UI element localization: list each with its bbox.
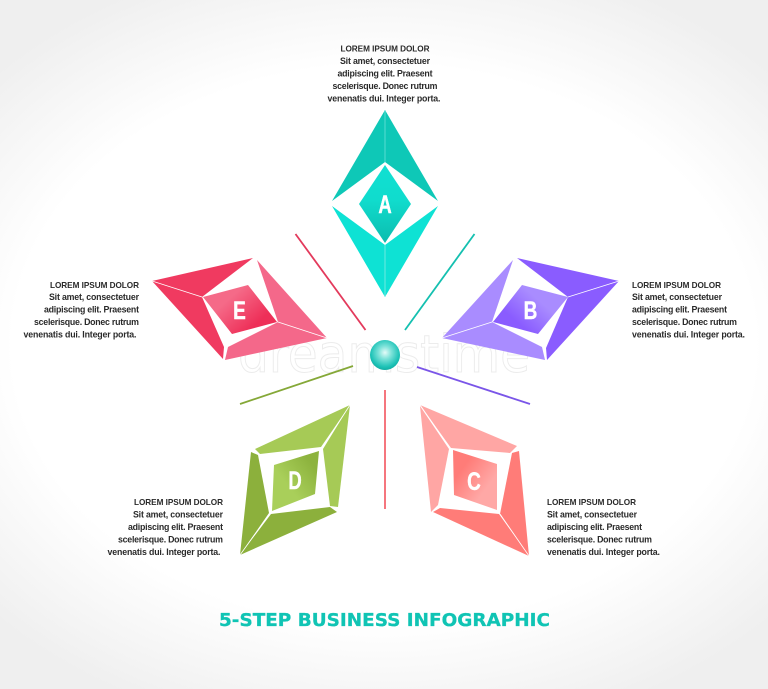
- letter B: B: [524, 296, 537, 325]
- text block B: LOREM IPSUM DOLOR: [632, 281, 721, 290]
- text block D: venenatis dui. Integer porta.: [108, 547, 220, 557]
- step B diamond: [442, 258, 619, 360]
- text block C: venenatis dui. Integer porta.: [547, 547, 660, 557]
- text block D: Sit amet, consectetuer: [133, 510, 224, 520]
- text block A: [328, 44, 440, 104]
- text block E: [24, 281, 140, 340]
- step A diamond: [332, 110, 438, 297]
- step C diamond: [420, 405, 529, 556]
- step E diamond: [152, 258, 327, 360]
- text block D: [108, 498, 224, 557]
- watermark: dreamstime: [238, 325, 530, 385]
- center ball: [370, 340, 400, 370]
- letter C: C: [467, 467, 481, 496]
- text block A: LOREM IPSUM DOLOR: [340, 44, 430, 54]
- text block E: scelerisque. Donec rutrum: [34, 317, 139, 327]
- connector lines: [240, 234, 530, 509]
- letter E: E: [233, 296, 246, 325]
- text block C: Sit amet, consectetuer: [547, 510, 638, 520]
- step D diamond: [240, 405, 350, 555]
- text block C: LOREM IPSUM DOLOR: [547, 498, 636, 507]
- title: 5-STEP BUSINESS INFOGRAPHIC: [219, 610, 550, 631]
- text block C: [547, 498, 660, 557]
- text block A: venenatis dui. Integer porta.: [328, 94, 440, 104]
- text block A: scelerisque. Donec rutrum: [332, 81, 438, 91]
- letter D: D: [288, 466, 302, 495]
- text block B: Sit amet, consectetuer: [632, 292, 723, 302]
- text block E: adipiscing elit. Praesent: [44, 304, 139, 314]
- text block B: [632, 281, 745, 340]
- text block B: venenatis dui. Integer porta.: [632, 330, 745, 340]
- text block A: adipiscing elit. Praesent: [338, 68, 433, 78]
- text block B: scelerisque. Donec rutrum: [632, 317, 737, 327]
- text block B: adipiscing elit. Praesent: [632, 304, 727, 314]
- text block D: LOREM IPSUM DOLOR: [134, 498, 223, 507]
- letter A: A: [378, 190, 392, 219]
- text block E: venenatis dui. Integer porta.: [24, 330, 136, 340]
- text block D: adipiscing elit. Praesent: [128, 522, 223, 532]
- text block A: Sit amet, consectetuer: [340, 56, 431, 66]
- text block E: Sit amet, consectetuer: [49, 292, 140, 302]
- text block E: LOREM IPSUM DOLOR: [50, 281, 139, 290]
- text block D: scelerisque. Donec rutrum: [118, 534, 223, 544]
- text block C: scelerisque. Donec rutrum: [547, 534, 652, 544]
- text block C: adipiscing elit. Praesent: [547, 522, 642, 532]
